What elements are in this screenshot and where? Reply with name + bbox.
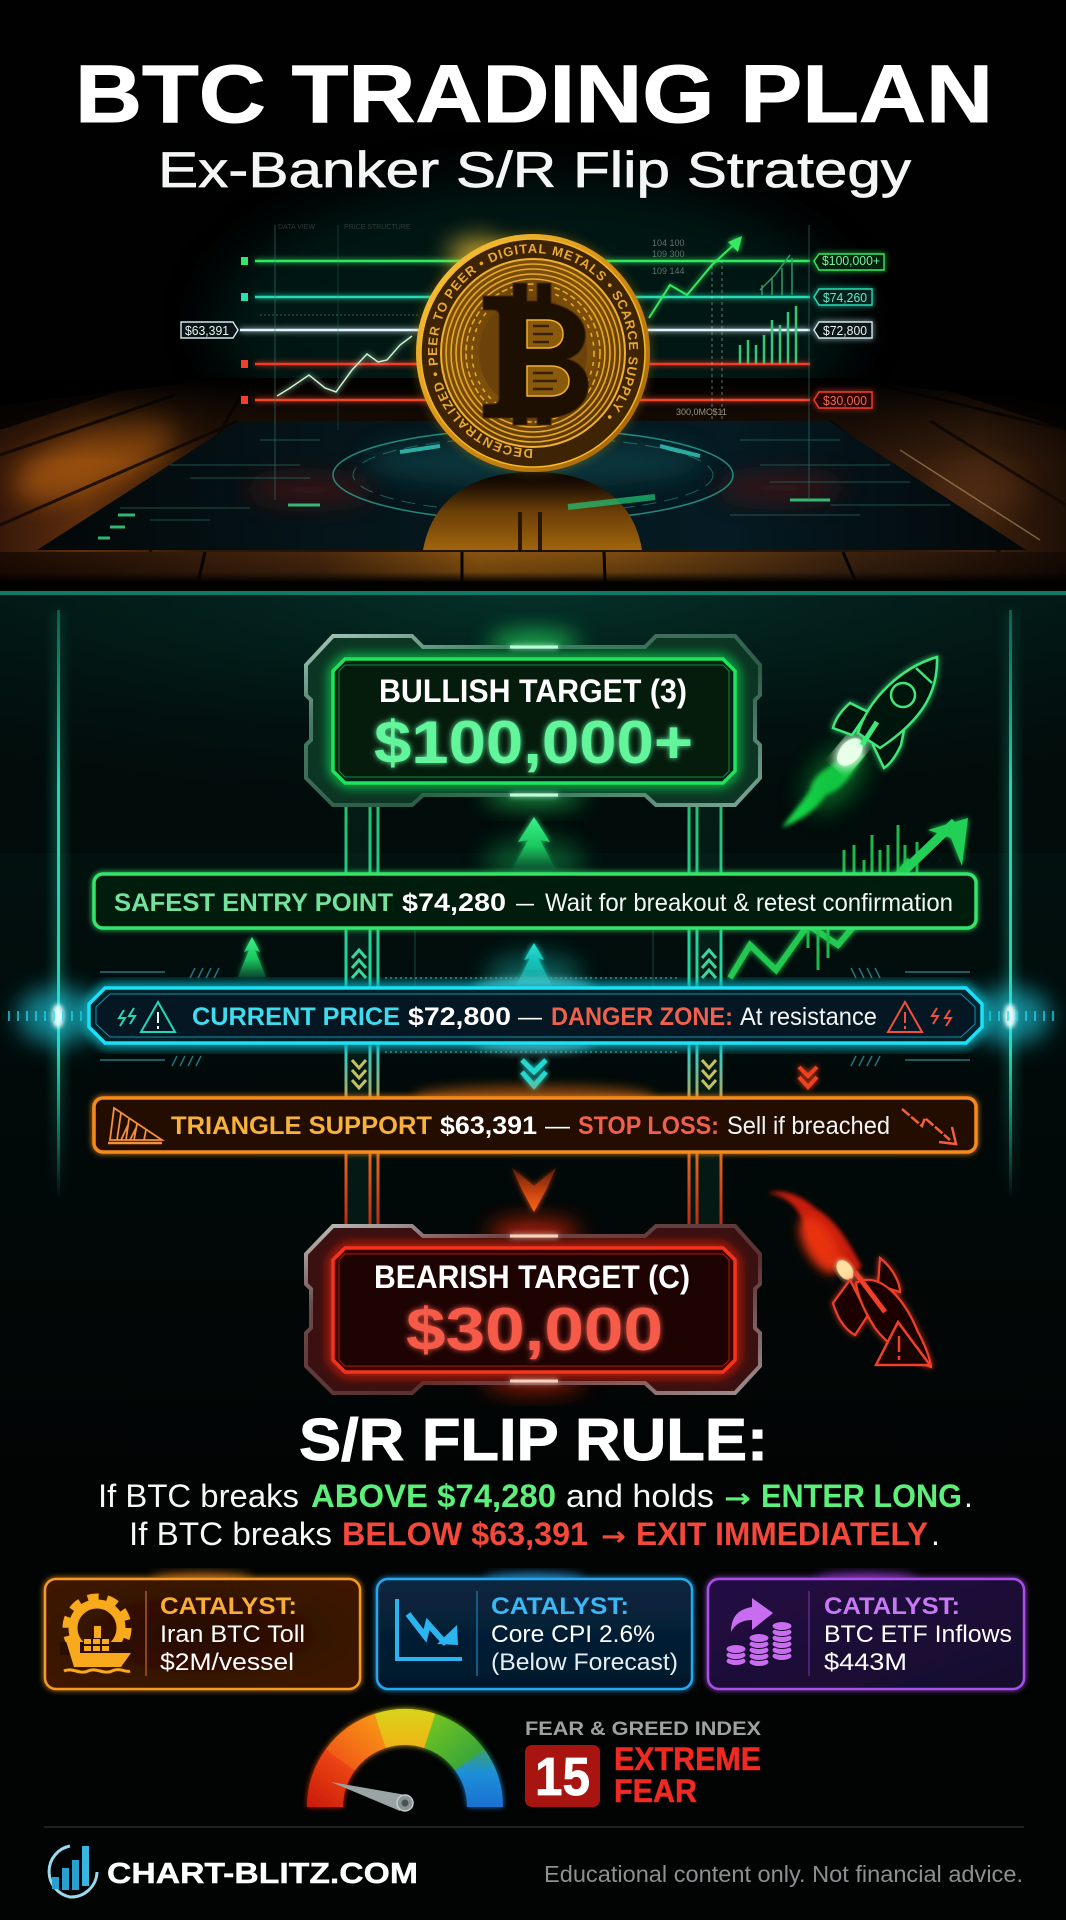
horizontal energy flare xyxy=(8,988,1060,1044)
panel: safest entry bar: $74,280 xyxy=(402,889,506,917)
panel: catalyst Iran toll: CATALYST: xyxy=(160,1593,297,1620)
icon: coins and arrow xyxy=(726,1598,792,1666)
rising arrow chart xyxy=(649,236,742,318)
panel: safest entry bar: — xyxy=(516,889,534,917)
chart: green rising arrow xyxy=(730,818,968,978)
faint chart annotations xyxy=(278,224,727,417)
wood table xyxy=(0,378,1066,552)
faint chart annotations: PRICE STRUCTURE xyxy=(344,224,411,231)
support pillars xyxy=(345,805,722,1225)
text: exit rule: EXIT IMMEDIATELY xyxy=(636,1516,928,1552)
text: long rule: If BTC breaks xyxy=(98,1478,299,1514)
tag $100,000+: $100,000+ xyxy=(822,253,880,268)
panel: catalyst Iran toll: $2M/vessel xyxy=(160,1649,294,1676)
icon: warning right xyxy=(888,1002,951,1032)
panel: current price bar: CURRENT PRICE xyxy=(192,1003,400,1031)
panel: triangle support bar: TRIANGLE SUPPORT xyxy=(171,1112,432,1140)
text: exit rule: If BTC breaks xyxy=(129,1516,332,1552)
support and resistance lines xyxy=(240,224,810,500)
arrow: centre down teal xyxy=(522,1060,546,1086)
icon: red falling rocket xyxy=(768,1192,931,1367)
text: exit rule xyxy=(129,1516,940,1552)
panel: safest entry bar xyxy=(94,874,976,928)
text: long rule xyxy=(98,1478,973,1514)
icon: gear and ship xyxy=(60,1597,134,1672)
panel: current price bar: — xyxy=(518,1003,542,1031)
text: long rule: → xyxy=(724,1484,751,1514)
icon: down arrow xyxy=(902,1109,956,1144)
text: long rule: ENTER LONG xyxy=(761,1478,962,1514)
volume bars xyxy=(740,306,796,364)
panel: triangle support bar: $63,391 xyxy=(440,1112,537,1140)
gauge needle xyxy=(331,1782,413,1811)
icon: descending triangle xyxy=(108,1108,162,1143)
value: $30,000 xyxy=(406,1296,663,1363)
panel: catalyst core CPI: (Below Forecast) xyxy=(491,1649,678,1676)
wood planks xyxy=(0,552,1066,588)
panel: bearish target xyxy=(306,1222,760,1393)
faint chart annotations: 109 300 xyxy=(652,249,685,259)
panel: triangle support bar: — xyxy=(545,1112,570,1140)
panel: catalyst core CPI: Core CPI 2.6% xyxy=(491,1621,655,1648)
panel: current price bar: At resistance xyxy=(740,1003,877,1031)
faint chart annotations: 104 100 xyxy=(652,238,685,248)
tag $30,000: $30,000 xyxy=(823,393,867,408)
panel: current price bar xyxy=(89,968,982,1066)
faint chart annotations: 300,0MC$11 xyxy=(676,407,727,417)
panel: current price bar: $72,800 xyxy=(408,1003,511,1031)
logo: chart-blitz icon xyxy=(49,1846,97,1897)
tag $74,260: $74,260 xyxy=(823,290,867,305)
faint chart annotations: DATA VIEW xyxy=(278,224,315,231)
panel: catalyst ETF inflows: CATALYST: xyxy=(824,1593,960,1620)
heading: BULLISH TARGET (3) xyxy=(379,673,687,709)
arrow: right down red xyxy=(799,1067,817,1087)
text: exit rule: . xyxy=(931,1516,940,1552)
bitcoin symbol xyxy=(483,283,588,425)
panel: catalyst Iran toll: Iran BTC Toll xyxy=(160,1621,305,1648)
chart: fear and greed gauge xyxy=(307,1709,503,1811)
icon: green rocket xyxy=(782,657,937,828)
panel: hero scene xyxy=(0,184,1066,582)
text: extreme fear xyxy=(614,1741,761,1809)
text: extreme fear: EXTREME xyxy=(614,1741,761,1777)
title: BTC TRADING PLAN xyxy=(75,49,993,140)
text: exit rule: → xyxy=(601,1522,626,1552)
panel: safest entry bar: SAFEST ENTRY POINT xyxy=(114,889,393,917)
panel: catalyst ETF inflows: BTC ETF Inflows xyxy=(824,1621,1012,1648)
arrow: centre down orange xyxy=(512,1168,556,1212)
panel: catalyst core CPI: CATALYST: xyxy=(491,1593,629,1620)
text: brand: CHART-BLITZ.COM xyxy=(107,1858,418,1890)
price tags xyxy=(181,253,884,408)
holographic screen xyxy=(37,421,1026,550)
arrow: left small up xyxy=(238,937,266,977)
icon: gold bitcoin coin: DECENTRALIZED • PEER TO PEER • DIGITAL METALS • SCARCE SUPPLY • xyxy=(428,244,638,458)
chevrons on pillars xyxy=(352,950,716,1088)
heading: S/R flip rule: S/R FLIP RULE: xyxy=(299,1407,768,1473)
panel: bullish target xyxy=(306,632,760,805)
panel: price ladder section xyxy=(0,591,1066,1493)
value: $100,000+ xyxy=(374,709,693,776)
icon: warning left xyxy=(119,1002,175,1032)
left price line chart xyxy=(277,336,412,396)
text: exit rule: BELOW $63,391 xyxy=(342,1516,588,1552)
heading: BEARISH TARGET (C) xyxy=(374,1259,690,1295)
faint chart annotations: 109 144 xyxy=(652,266,685,276)
coin reflection xyxy=(423,472,642,550)
arrow: centre up teal xyxy=(516,943,552,986)
panel: triangle support bar xyxy=(94,1085,976,1152)
panel: triangle support bar: Sell if breached xyxy=(727,1112,890,1140)
arrow: centre up green xyxy=(512,817,556,870)
side neon rails xyxy=(52,610,1017,1200)
panel: catalyst Iran toll xyxy=(45,1573,360,1689)
panel: catalyst ETF inflows: $443M xyxy=(824,1649,907,1676)
icon: falling chart xyxy=(397,1599,462,1659)
panel: current price bar: DANGER ZONE: xyxy=(551,1003,733,1031)
panel: catalyst ETF inflows xyxy=(708,1573,1024,1689)
text: disclaimer: Educational content only. Not financial advice. xyxy=(544,1861,1023,1887)
panel: catalyst core CPI xyxy=(377,1573,692,1689)
tag $63,391: $63,391 xyxy=(185,323,229,338)
text: long rule: ABOVE $74,280 xyxy=(311,1478,556,1514)
panel: triangle support bar: STOP LOSS: xyxy=(578,1112,719,1140)
panel: safest entry bar: Wait for breakout & retest confirmation xyxy=(545,889,953,917)
tag $72,800: $72,800 xyxy=(823,323,867,338)
text: fear and greed label: FEAR & GREED INDEX xyxy=(525,1719,761,1740)
subtitle: Ex-Banker S/R Flip Strategy xyxy=(158,142,911,198)
text: extreme fear: FEAR xyxy=(614,1773,697,1809)
badge: index value 15: 15 xyxy=(535,1747,590,1807)
text: long rule: . xyxy=(964,1478,973,1514)
text: long rule: and holds xyxy=(566,1478,714,1514)
